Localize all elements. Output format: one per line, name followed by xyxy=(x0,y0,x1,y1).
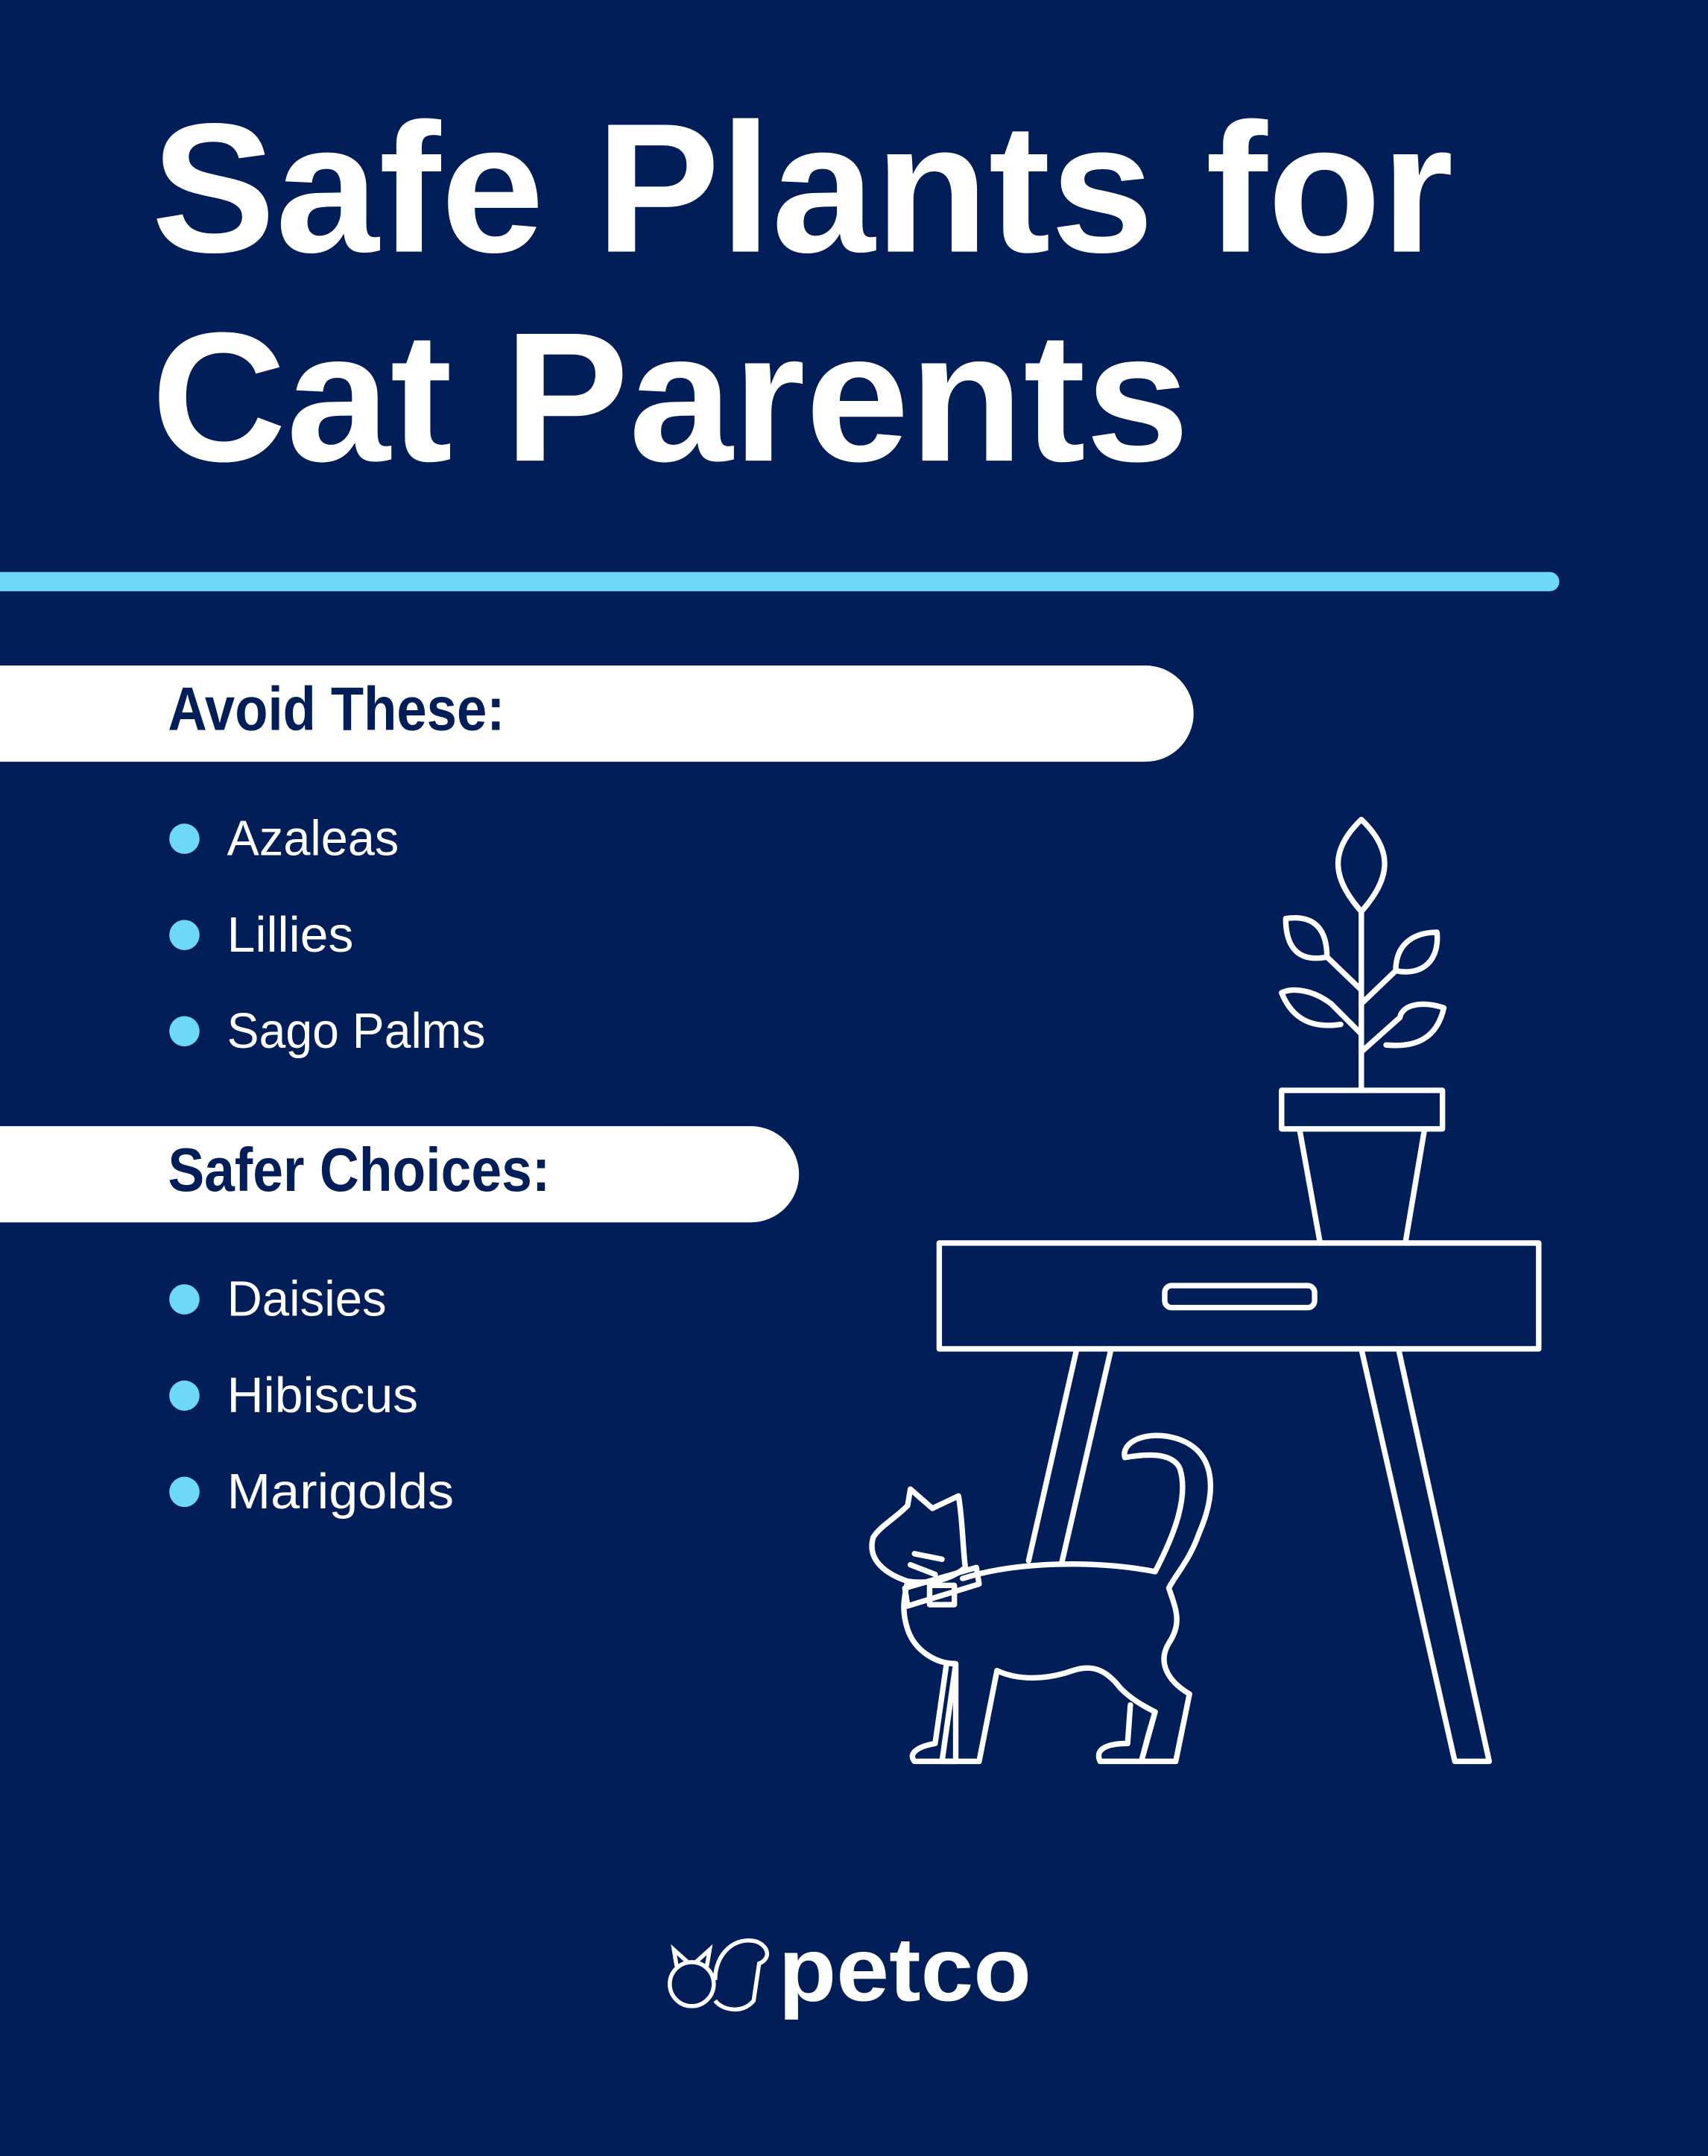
logo: petco xyxy=(670,1919,1031,2020)
logo: petco: petco xyxy=(779,1919,1031,2020)
safer list xyxy=(169,1272,454,1520)
panel: safer choices xyxy=(0,1126,799,1520)
pill heading: safer: Safer Choices: xyxy=(168,1135,550,1204)
avoid list xyxy=(169,812,486,1059)
cat xyxy=(872,1435,1210,1761)
title: Safe Plants for xyxy=(151,86,1453,291)
title xyxy=(151,86,1453,500)
safer list: Marigolds xyxy=(227,1464,454,1520)
divider line xyxy=(0,576,1550,587)
avoid list: Azaleas xyxy=(227,812,399,867)
pill heading: avoid xyxy=(0,666,1194,762)
safer list: Daisies xyxy=(227,1272,387,1327)
pot xyxy=(1282,1090,1443,1243)
logo icon xyxy=(670,1941,767,2009)
avoid list: Lillies xyxy=(227,908,353,963)
title: Cat Parents xyxy=(151,294,1189,500)
plant xyxy=(1282,820,1444,1090)
safer list: Hibiscus xyxy=(227,1368,418,1423)
avoid list: Sago Palms xyxy=(227,1004,486,1059)
pill heading: avoid: Avoid These: xyxy=(168,674,505,744)
table xyxy=(939,1243,1539,1761)
pill heading: safer xyxy=(0,1126,799,1222)
illustration: table with plant and cat xyxy=(872,820,1539,1761)
panel: avoid these xyxy=(0,666,1194,1059)
